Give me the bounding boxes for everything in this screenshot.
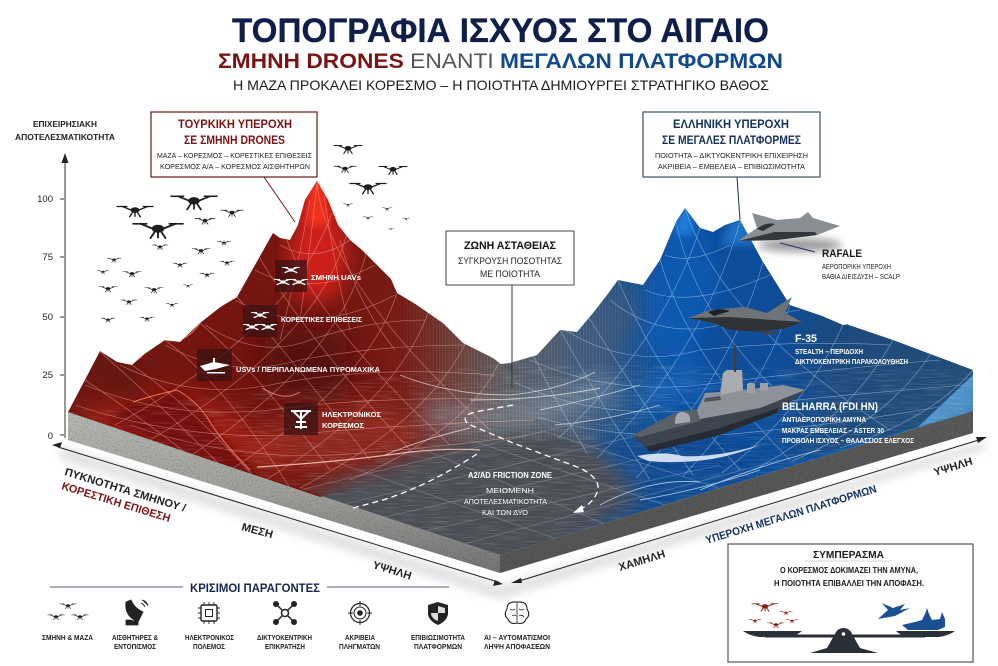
factor: platform survivability xyxy=(411,602,465,651)
label: F-35: ΔΙΚΤΥΟΚΕΝΤΡΙΚΗ ΠΑΡΑΚΟΛΟΥΘΗΣΗ xyxy=(795,357,908,366)
y axis: operational effectiveness: 25 xyxy=(42,370,53,381)
callout: instability zone: ΜΕ ΠΟΙΟΤΗΤΑ xyxy=(480,269,540,279)
drone swarm xyxy=(97,146,410,322)
route arrowhead xyxy=(573,505,584,513)
label: Rafale: RAFALE xyxy=(822,248,862,260)
foreground red ridge xyxy=(108,390,260,478)
balance scale xyxy=(743,628,955,653)
conclusion panel: ΣΥΜΠΕΡΑΣΜΑ xyxy=(813,549,884,561)
water highlights xyxy=(600,450,820,505)
callout: Greek superiority: ΑΚΡΙΒΕΙΑ – ΕΜΒΕΛΕΙΑ – ΕΠΙΒΙΩΣΙΜΟΤΗΤΑ xyxy=(658,162,805,171)
callout: instability zone xyxy=(446,231,574,388)
bright red streaks xyxy=(100,323,300,470)
concrete texture xyxy=(68,411,973,573)
jet: F-35 xyxy=(688,297,802,335)
y axis: operational effectiveness: ΕΠΙΧΕΙΡΗΣΙΑΚΗ xyxy=(33,119,97,129)
callout: Turkish superiority: ΜΑΖΑ – ΚΟΡΕΣΜΟΣ – ΚΟΡΕΣΤΙΚΕΣ ΕΠΙΘΕΣΕΙΣ xyxy=(157,151,312,160)
y axis: operational effectiveness: 50 xyxy=(42,312,53,323)
factor: sensors and detection xyxy=(112,600,158,651)
factor: strike precision: ΑΚΡΙΒΕΙΑ xyxy=(345,635,375,642)
platform shadow xyxy=(60,440,985,600)
label: USVs and loitering munitions: USVs / ΠΕΡΙΠΛΑΝΩΜΕΝΑ ΠΥΡΟΜΑΧΙΚΑ xyxy=(236,365,381,374)
concrete side left xyxy=(68,412,500,573)
factor: strike precision: ΠΛΗΓΜΑΤΩΝ xyxy=(339,644,380,651)
label: UAV swarms: ΣΜΗΝΗ UAVs xyxy=(311,273,361,282)
callout: instability zone: ΖΩΝΗ ΑΣΤΑΘΕΙΑΣ xyxy=(464,240,556,252)
terrain floor xyxy=(68,363,973,555)
y axis: operational effectiveness: 75 xyxy=(42,252,53,263)
callout: Greek superiority: ΕΛΛΗΝΙΚΗ ΥΠΕΡΟΧΗ xyxy=(673,119,789,131)
axis: swarm density: ΠΥΚΝΟΤΗΤΑ ΣΜΗΝΟΥ / xyxy=(63,466,187,515)
label: Belharra: BELHARRA (FDI HN) xyxy=(782,401,878,413)
factor: electronic warfare: ΠΟΛΕΜΟΣ xyxy=(193,644,225,651)
tagline: Η ΜΑΖΑ ΠΡΟΚΑΛΕΙ ΚΟΡΕΣΜΟ – Η ΠΟΙΟΤΗΤΑ ΔΗΜΙΟΥΡΓΕΙ ΣΤΡΑΤΗΓΙΚΟ ΒΑΘΟΣ xyxy=(233,77,769,93)
label: electronic saturation xyxy=(284,403,381,435)
fine terrain hatching xyxy=(394,280,667,440)
callout: Turkish superiority: ΚΟΡΕΣΜΟΣ Α/Α – ΚΟΡΕΣΜΟΣ ΑΙΣΘΗΤΗΡΩΝ xyxy=(160,162,310,171)
label: Rafale: ΒΑΘΙΑ ΔΙΕΙΣΔΥΣΗ – SCALP xyxy=(822,272,900,281)
concrete side right xyxy=(500,411,973,573)
central floor blend xyxy=(300,372,640,560)
factor: swarms and mass xyxy=(42,604,93,642)
factor: swarms and mass: ΣΜΗΝΗ & ΜΑΖΑ xyxy=(42,635,93,642)
floor grid lines xyxy=(300,420,780,545)
callout: Turkish superiority: ΣΕ ΣΜΗΝΗ DRONES xyxy=(184,135,285,147)
blue ship on scale xyxy=(902,608,945,630)
conclusion panel xyxy=(728,544,973,662)
label: A2/AD friction zone xyxy=(464,471,553,517)
factor: sensors and detection: ΑΙΣΘΗΤΗΡΕΣ & xyxy=(112,635,158,642)
factor: electronic warfare: ΗΛΕΚΤΡΟΝΙΚΟΣ xyxy=(185,635,234,642)
factor: sensors and detection: ΕΝΤΟΠΙΣΜΟΣ xyxy=(114,644,156,651)
3D terrain block xyxy=(60,175,985,600)
red mesh lines xyxy=(75,182,535,488)
axis: swarm density: ΜΕΣΗ xyxy=(240,521,274,541)
blue mountain xyxy=(510,205,973,480)
label: Belharra xyxy=(782,401,914,445)
label: UAV swarms xyxy=(275,260,361,292)
jet: Rafale xyxy=(738,212,840,241)
red drones on scale xyxy=(749,604,798,628)
label: saturation attacks: ΚΟΡΕΣΤΙΚΕΣ ΕΠΙΘΕΣΕΙΣ xyxy=(281,315,362,324)
label: A2/AD friction zone: A2/AD FRICTION ZONE xyxy=(468,471,553,480)
label: A2/AD friction zone: ΑΠΟΤΕΛΕΣΜΑΤΙΚΟΤΗΤΑ xyxy=(464,497,547,506)
conclusion panel: Η ΠΟΙΟΤΗΤΑ ΕΠΙΒΑΛΛΕΙ ΤΗΝ ΑΠΟΦΑΣΗ. xyxy=(774,579,924,588)
callout: Turkish superiority xyxy=(151,112,317,222)
title: ΤΟΠΟΓΡΑΦΙΑ ΙΣΧΥΟΣ ΣΤΟ ΑΙΓΑΙΟ xyxy=(232,12,769,50)
axis: large platform superiority: ΥΠΕΡΟΧΗ ΜΕΓΑΛΩΝ ΠΛΑΤΦΟΡΜΩΝ xyxy=(704,483,878,547)
label: Belharra: ΑΝΤΙΑΕΡΟΠΟΡΙΚΗ ΑΜΥΝΑ xyxy=(782,415,866,424)
jet shadow xyxy=(758,238,842,252)
callout: Greek superiority xyxy=(643,112,820,220)
axis: large platform superiority xyxy=(511,437,987,583)
conclusion panel: Ο ΚΟΡΕΣΜΟΣ ΔΟΚΙΜΑΖΕΙ ΤΗΝ ΑΜΥΝΑ, xyxy=(780,566,918,575)
callout: Turkish superiority: ΤΟΥΡΚΙΚΗ ΥΠΕΡΟΧΗ xyxy=(178,119,292,131)
y axis: operational effectiveness: 100 xyxy=(37,194,53,205)
label: Belharra: ΠΡΟΒΟΛΗ ΙΣΧΥΟΣ – ΘΑΛΑΣΣΙΟΣ ΕΛΕΓΧΟΣ xyxy=(782,436,914,445)
label: electronic saturation: ΚΟΡΕΣΜΟΣ xyxy=(322,421,364,430)
factor: electronic warfare xyxy=(185,602,234,651)
red mountain xyxy=(68,175,545,497)
factor: AI and decision automation: AI – ΑΥΤΟΜΑΤΙΣΜΟΙ xyxy=(484,635,550,642)
subtitle: ΣΜΗΝΗ DRONES ΕΝΑΝΤΙ ΜΕΓΑΛΩΝ ΠΛΑΤΦΟΡΜΩΝ xyxy=(218,50,783,73)
factor: AI and decision automation xyxy=(484,602,550,651)
y axis: operational effectiveness: ΑΠΟΤΕΛΕΣΜΑΤΙΚΟΤΗΤΑ xyxy=(15,132,115,142)
callout: instability zone: ΣΥΓΚΡΟΥΣΗ ΠΟΣΟΤΗΤΑΣ xyxy=(458,256,562,266)
blue jet on scale xyxy=(878,603,910,619)
label: Belharra: ΜΑΚΡΑΣ ΕΜΒΕΛΕΙΑΣ – ASTER 30 xyxy=(782,426,884,435)
y axis: operational effectiveness xyxy=(15,119,115,442)
label: A2/AD friction zone: ΜΕΙΩΜΕΝΗ xyxy=(486,486,534,495)
terrain streak texture xyxy=(68,363,973,555)
factor: network-centric dominance: ΔΙΚΤΥΟΚΕΝΤΡΙΚΗ xyxy=(257,635,312,642)
label: Rafale xyxy=(780,243,900,281)
label: USVs and loitering munitions xyxy=(197,349,381,381)
label: F-35: STEALTH – ΠΕΡΙΔΟΧΗ xyxy=(795,347,863,356)
wake xyxy=(637,445,760,462)
label: F-35: F-35 xyxy=(795,333,817,345)
label: F-35 xyxy=(795,333,908,366)
callout: Greek superiority: ΠΟΙΟΤΗΤΑ – ΔΙΚΤΥΟΚΕΝΤΡΙΚΗ ΕΠΙΧΕΙΡΗΣΗ xyxy=(655,151,808,160)
factor: platform survivability: ΠΛΑΤΦΟΡΜΩΝ xyxy=(414,644,462,651)
factor: network-centric dominance: ΕΠΙΚΡΑΤΗΣΗ xyxy=(265,644,305,651)
label: electronic saturation: ΗΛΕΚΤΡΟΝΙΚΟΣ xyxy=(322,410,381,419)
blue mesh lines xyxy=(510,208,973,505)
axis: swarm density: ΥΨΗΛΗ xyxy=(371,559,413,583)
factor: network-centric dominance xyxy=(257,601,312,651)
y axis: operational effectiveness: 0 xyxy=(48,431,53,442)
factor: platform survivability: ΕΠΙΒΙΩΣΙΜΟΤΗΤΑ xyxy=(411,635,465,642)
axis: swarm density: ΚΟΡΕΣΤΙΚΗ ΕΠΙΘΕΣΗ xyxy=(60,480,172,525)
label: A2/AD friction zone: ΚΑΙ ΤΩΝ ΔΥΟ xyxy=(482,508,528,517)
dashed friction route xyxy=(353,405,598,509)
factor: AI and decision automation: ΛΗΨΗ ΑΠΟΦΑΣΕΩΝ xyxy=(484,644,550,651)
axis: swarm density xyxy=(52,442,503,586)
critical factors heading: ΚΡΙΣΙΜΟΙ ΠΑΡΑΓΟΝΤΕΣ xyxy=(190,581,320,595)
ship: Belharra frigate xyxy=(633,345,805,452)
axis: large platform superiority: ΧΑΜΗΛΗ xyxy=(617,548,667,574)
label: saturation attacks xyxy=(243,305,362,337)
axis: large platform superiority: ΥΨΗΛΗ xyxy=(932,456,974,479)
bright floor streak xyxy=(257,449,480,467)
factor: strike precision xyxy=(339,601,380,651)
label: Rafale: ΑΕΡΟΠΟΡΙΚΗ ΥΠΕΡΟΧΗ xyxy=(822,262,891,271)
water cutaway xyxy=(918,375,973,427)
callout: Greek superiority: ΣΕ ΜΕΓΑΛΕΣ ΠΛΑΤΦΟΡΜΕΣ xyxy=(662,135,801,147)
bright white valley lines xyxy=(385,372,660,455)
